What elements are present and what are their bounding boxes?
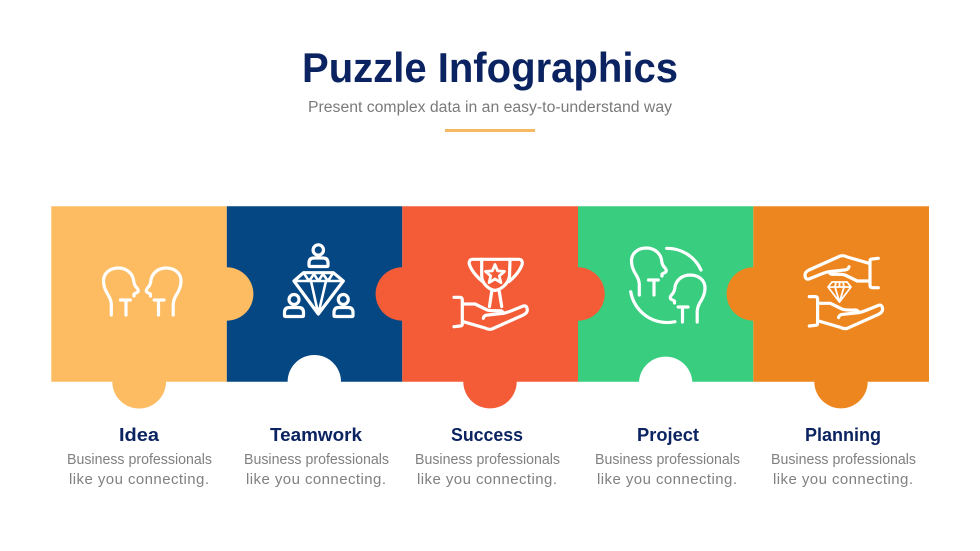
title: Puzzle Infographics	[302, 44, 678, 91]
puzzle piece: teamwork	[227, 206, 402, 382]
label: idea: Idea	[119, 425, 160, 445]
label: teamwork: Business professionals	[244, 451, 389, 468]
label: idea: like you connecting.	[69, 471, 209, 488]
label: planning: Planning	[805, 425, 881, 445]
label: planning	[771, 425, 916, 488]
icon: two heads in a cycle	[631, 248, 705, 323]
label: success: Business professionals	[415, 451, 560, 468]
subtitle: Present complex data in an easy-to-understand way	[308, 99, 672, 116]
label: idea	[67, 425, 212, 488]
icon: diamond with three people	[284, 245, 353, 316]
label: teamwork: Teamwork	[270, 425, 363, 445]
label: idea: Business professionals	[67, 451, 212, 468]
icon: two heads facing	[104, 268, 181, 315]
label: success: like you connecting.	[417, 471, 557, 488]
label: teamwork	[244, 425, 389, 488]
label: teamwork: like you connecting.	[246, 471, 386, 488]
puzzle piece: planning	[727, 206, 929, 408]
label: planning: like you connecting.	[773, 471, 913, 488]
title underline	[445, 129, 535, 132]
icon: trophy on a hand	[454, 259, 527, 329]
puzzle piece: idea	[51, 206, 253, 409]
puzzle piece: project	[578, 206, 753, 382]
label: success: Success	[451, 425, 523, 445]
icon: hands protecting a diamond	[805, 256, 883, 329]
label: project: Project	[637, 425, 699, 445]
puzzle piece: success	[376, 206, 605, 408]
label: project: like you connecting.	[597, 471, 737, 488]
label: success	[415, 425, 560, 488]
label: project	[595, 425, 740, 488]
label: project: Business professionals	[595, 451, 740, 468]
label: planning: Business professionals	[771, 451, 916, 468]
